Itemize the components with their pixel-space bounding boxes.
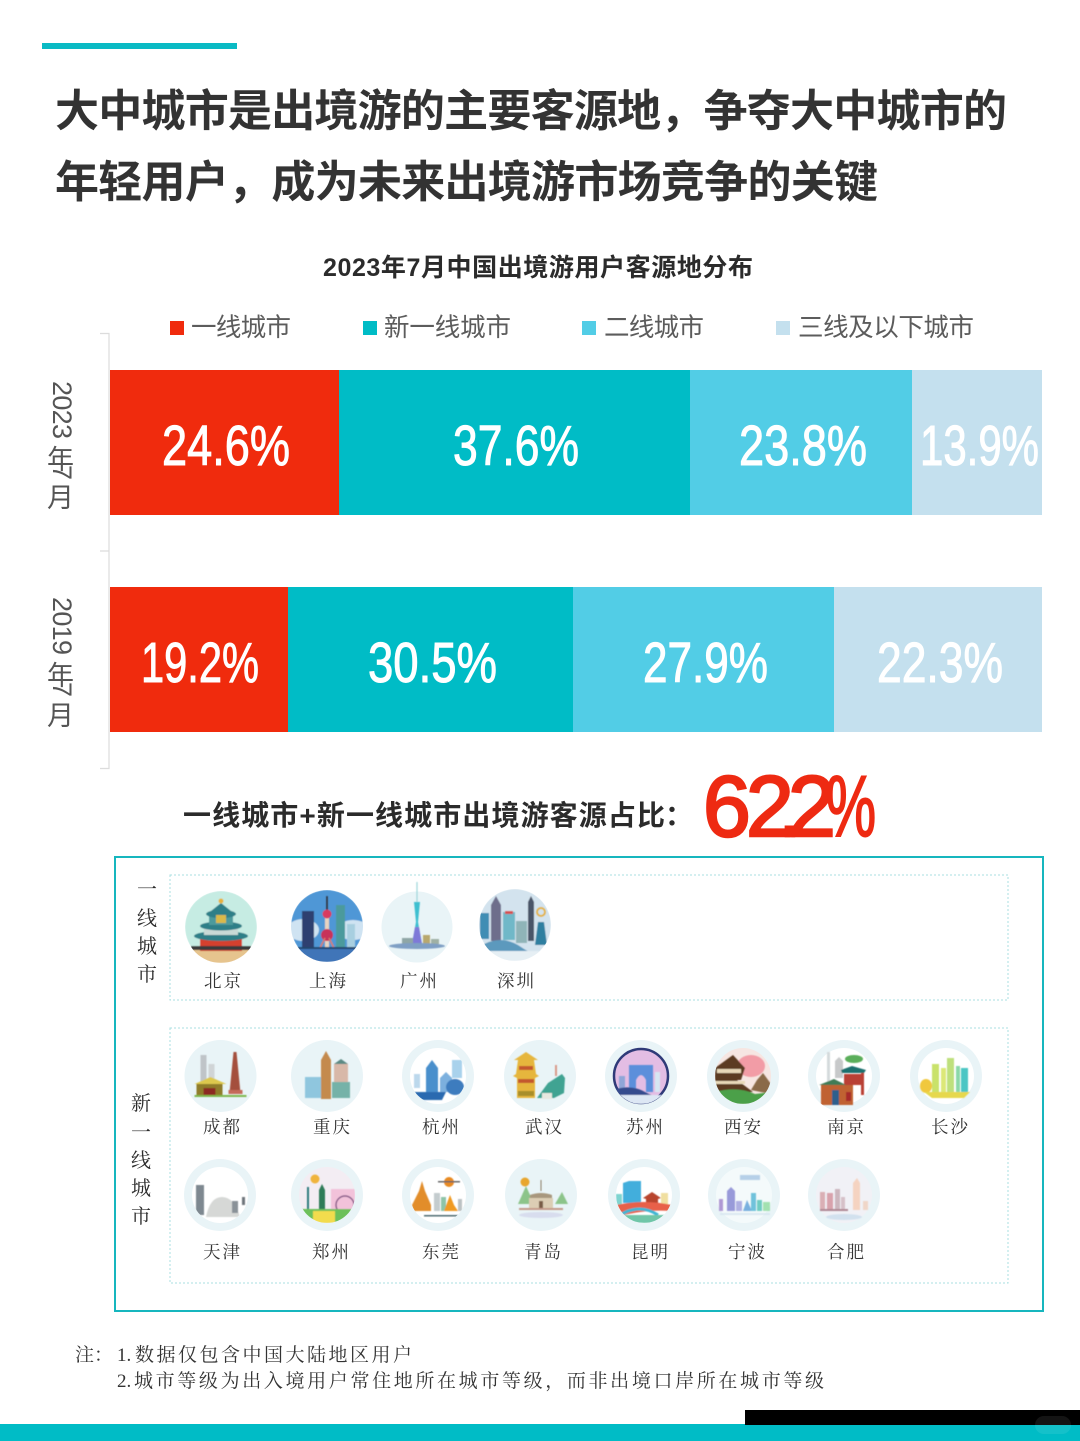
city: Dongguan — [402, 1159, 474, 1231]
title: 年轻用户，成为未来出境游市场竞争的关键 — [55, 158, 878, 207]
legend: 新一线城市 — [384, 314, 511, 342]
city: Suzhou — [605, 1040, 677, 1112]
label: new tier 1: 新 — [131, 1092, 151, 1115]
bar: 2019: 27.9% — [643, 631, 768, 695]
city: Hefei — [808, 1159, 880, 1231]
city names: 广州 — [400, 971, 437, 991]
city: Changsha — [910, 1040, 982, 1112]
city names: 武汉 — [525, 1117, 562, 1137]
label: new tier 1: 城 — [131, 1177, 151, 1200]
city: Nanjing — [808, 1040, 880, 1112]
city: Chongqing — [291, 1040, 363, 1112]
label: tier 1: 城 — [137, 935, 157, 958]
city: Hangzhou — [402, 1040, 474, 1112]
callout: ： — [665, 800, 693, 831]
year label 2019: 2019 — [47, 597, 77, 655]
bar: 2023: 13.9% — [920, 414, 1039, 478]
bar: 2019: 30.5% — [368, 631, 497, 695]
footnote: 城市等级为出入境用户常住地所在城市等级，而非出境口岸所在城市等级 — [134, 1370, 824, 1392]
bar: 2019: 19.2% — [141, 631, 259, 695]
year label 2023 — [47, 381, 77, 513]
title: 大中城市是出境游的主要客源地，争夺大中城市的 — [55, 87, 1007, 136]
city names: 昆明 — [631, 1242, 668, 1262]
city names: 北京 — [204, 971, 241, 991]
city names: 长沙 — [931, 1117, 968, 1137]
footnote: 2. — [117, 1371, 131, 1392]
axis — [100, 334, 109, 768]
callout: 一线城市+新一线城市出境游客源占比 — [183, 800, 665, 831]
city: Qingdao — [505, 1159, 577, 1231]
label: tier 1: 市 — [137, 963, 157, 986]
city: Beijing — [185, 891, 257, 963]
label: new tier 1: 市 — [131, 1205, 151, 1228]
city: Shanghai — [291, 890, 363, 962]
title — [55, 87, 1007, 207]
year label 2019: 7 — [47, 682, 77, 697]
city names: 重庆 — [313, 1117, 350, 1137]
year label 2023: 7 — [47, 465, 77, 480]
label: tier 1: 一 — [137, 879, 157, 901]
legend — [170, 314, 974, 342]
label: tier 1 — [137, 879, 157, 986]
city names: 成都 — [203, 1117, 240, 1137]
callout — [183, 759, 876, 855]
panel: cities — [115, 857, 1043, 1311]
footnote — [75, 1344, 824, 1392]
bottom bar — [0, 1410, 1080, 1441]
city: Wuhan — [504, 1040, 576, 1112]
city: Kunming — [608, 1159, 680, 1231]
footnote: 数据仅包含中国大陆地区用户 — [135, 1344, 412, 1366]
bar: 2023: 37.6% — [453, 414, 579, 478]
city names: 苏州 — [626, 1117, 663, 1137]
city: Chengdu — [184, 1040, 256, 1112]
callout: % — [826, 759, 876, 855]
city names: 深圳 — [497, 971, 534, 991]
year label 2023: 月 — [47, 483, 74, 513]
city names: 宁波 — [728, 1242, 766, 1262]
year label 2019 — [47, 597, 77, 731]
bar: 2019: 22.3% — [877, 631, 1003, 695]
city: Shenzhen — [479, 889, 551, 961]
city names: 合肥 — [827, 1242, 864, 1262]
year label 2019: 月 — [47, 701, 74, 731]
top accent bar — [42, 43, 237, 49]
year label 2023: 年 — [47, 445, 74, 475]
label: tier 1: 线 — [137, 907, 157, 930]
city names: 青岛 — [524, 1242, 561, 1262]
label: new tier 1: 线 — [131, 1149, 151, 1172]
legend: 一线城市 — [191, 314, 291, 342]
footnote: 注： — [75, 1344, 113, 1366]
bar: 2019 — [110, 587, 1042, 732]
year label 2023: 2023 — [47, 381, 77, 439]
bar: 2023: 24.6% — [162, 414, 290, 478]
city names: 天津 — [203, 1242, 240, 1262]
year label 2019: 年 — [47, 661, 74, 691]
label: new tier 1 — [131, 1092, 151, 1228]
footnote: 1. — [117, 1345, 131, 1366]
city: Guangzhou — [382, 882, 452, 962]
label: new tier 1: 一 — [131, 1122, 151, 1144]
city names: 杭州 — [422, 1117, 459, 1137]
legend: 二线城市 — [604, 314, 704, 342]
legend: 三线及以下城市 — [798, 314, 974, 342]
city names: 西安 — [724, 1117, 762, 1137]
bar: 2023 — [110, 370, 1042, 515]
chart title: 2023年7月中国出境游用户客源地分布 — [323, 253, 753, 282]
city: Ningbo — [708, 1159, 780, 1231]
city: Xi'an — [707, 1040, 779, 1112]
city names — [203, 971, 968, 1262]
city names: 南京 — [827, 1117, 864, 1137]
city: Zhengzhou — [291, 1159, 363, 1231]
city names: 上海 — [309, 971, 346, 991]
bar: 2023: 23.8% — [739, 414, 867, 478]
city names: 东莞 — [422, 1242, 459, 1262]
callout: 62.2 — [703, 759, 836, 855]
city names: 郑州 — [312, 1242, 349, 1262]
city: Tianjin — [184, 1159, 256, 1231]
